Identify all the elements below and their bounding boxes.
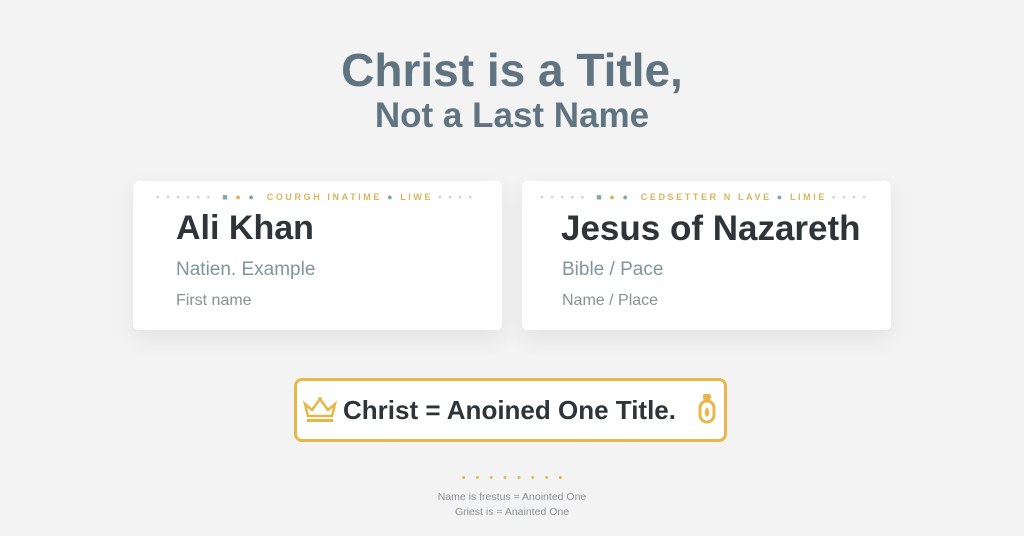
footnote text: Griest is = Anainted One [455,506,569,518]
panel: left card [133,181,502,330]
icon: oil lamp [698,394,716,424]
icon: crown [303,397,337,422]
callout [294,378,727,442]
card header dots: •••••• ■ ● ● COURGH INATIME ● LIWE •••• [156,192,479,202]
name: Jesus of Nazareth [561,209,861,248]
subtitle: Natien. Example [176,259,315,280]
subtitle: Bible / Pace [562,259,663,280]
dots row: •••••••• [462,472,572,484]
title [341,44,683,135]
footnote text: Name is frestus = Anointed One [438,491,586,503]
footnote [438,472,586,518]
title: Not a Last Name [375,96,649,135]
title: Christ is a Title, [341,44,683,96]
callout text: Christ = Anoined One Title. [343,395,676,425]
label: First name [176,292,252,309]
footnote text [438,491,586,518]
name: Ali Khan [176,209,314,247]
label: Name / Place [562,292,658,309]
panel: right card [522,181,891,330]
card header dots: ••••• ■ ● ● CEDSETTER N LAVE ● LIMIE •••• [540,192,873,202]
